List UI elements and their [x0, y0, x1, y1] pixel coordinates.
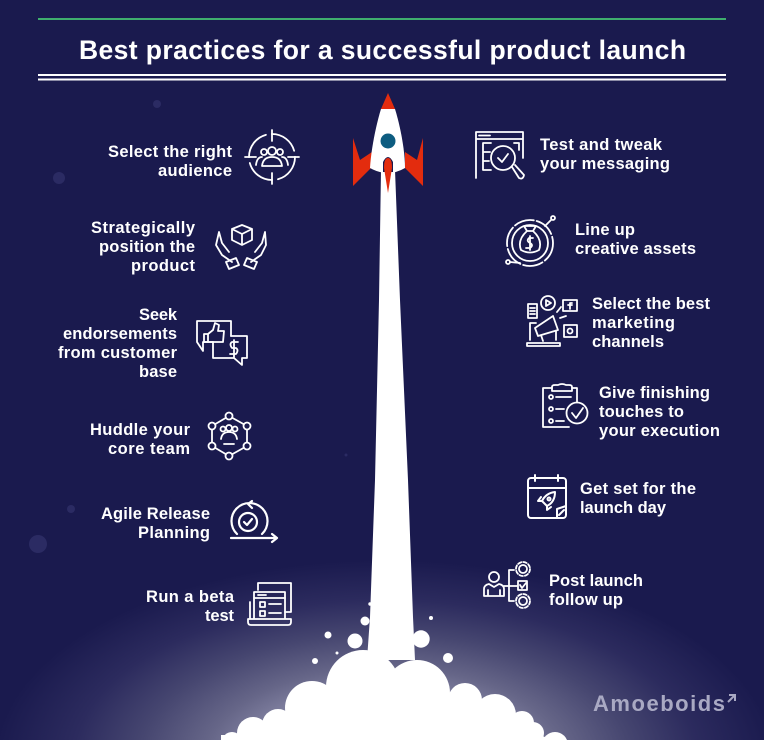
text: give finishing touches to your execution: your execution [599, 422, 720, 440]
rocket [353, 93, 423, 193]
text: strategically position the product: Strategically [91, 219, 196, 237]
text: select the best marketing channels: Select the best [592, 295, 710, 313]
text: huddle your core team: Huddle your [90, 421, 191, 439]
icon: checklist clipboard [543, 384, 588, 427]
icon: endorsement speech bubbles [197, 321, 247, 365]
text: seek endorsements from customer base: from customer [58, 344, 178, 362]
text: post launch follow up: follow up [549, 591, 623, 609]
logo: Amoeboids: Amoeboids [593, 691, 725, 716]
text: agile release planning: Planning [138, 524, 210, 542]
title: Best practices for a successful product launch [79, 35, 686, 65]
icon: hands and box [216, 225, 266, 269]
text: seek endorsements from customer base: endorsements [63, 325, 177, 343]
icon: marketing megaphone [527, 296, 577, 346]
icon: target audience [245, 130, 299, 184]
text: select the right audience: Select the right [108, 143, 232, 161]
rocket trail [367, 170, 415, 660]
text: huddle your core team: core team [108, 440, 190, 458]
cloud [221, 602, 568, 740]
text: select the best marketing channels: marketing [592, 314, 675, 332]
text: agile release planning: Agile Release [101, 505, 210, 523]
text: strategically position the product: product [131, 257, 196, 275]
text: run a beta test: test [205, 607, 234, 625]
text: test and tweak your messaging: Test and tweak [540, 136, 663, 154]
text: select the right audience: audience [158, 162, 232, 180]
text: select the best marketing channels: channels [592, 333, 664, 351]
icon: launch calendar [528, 475, 566, 518]
icon: magnifier on window [476, 132, 524, 179]
icon: money bag dial [506, 216, 555, 266]
text: strategically position the product: position the [99, 238, 195, 256]
text: test and tweak your messaging: your messaging [540, 155, 670, 173]
text: line up creative assets: creative assets [575, 240, 696, 258]
text: get set for the launch day: Get set for the [580, 480, 696, 498]
text: run a beta test: Run a beta [146, 588, 235, 606]
text: give finishing touches to your execution: touches to [599, 403, 684, 421]
icon: beta test laptop [248, 583, 291, 625]
text: seek endorsements from customer base: Seek [139, 306, 178, 324]
icon: agile cycle [231, 501, 277, 542]
icon: post launch gears [484, 562, 530, 608]
text: post launch follow up: Post launch [549, 572, 643, 590]
text: give finishing touches to your execution: Give finishing [599, 384, 710, 402]
icon: team network [208, 412, 250, 460]
text: get set for the launch day: launch day [580, 499, 667, 517]
text: line up creative assets: Line up [575, 221, 635, 239]
text: seek endorsements from customer base: base [139, 363, 177, 381]
